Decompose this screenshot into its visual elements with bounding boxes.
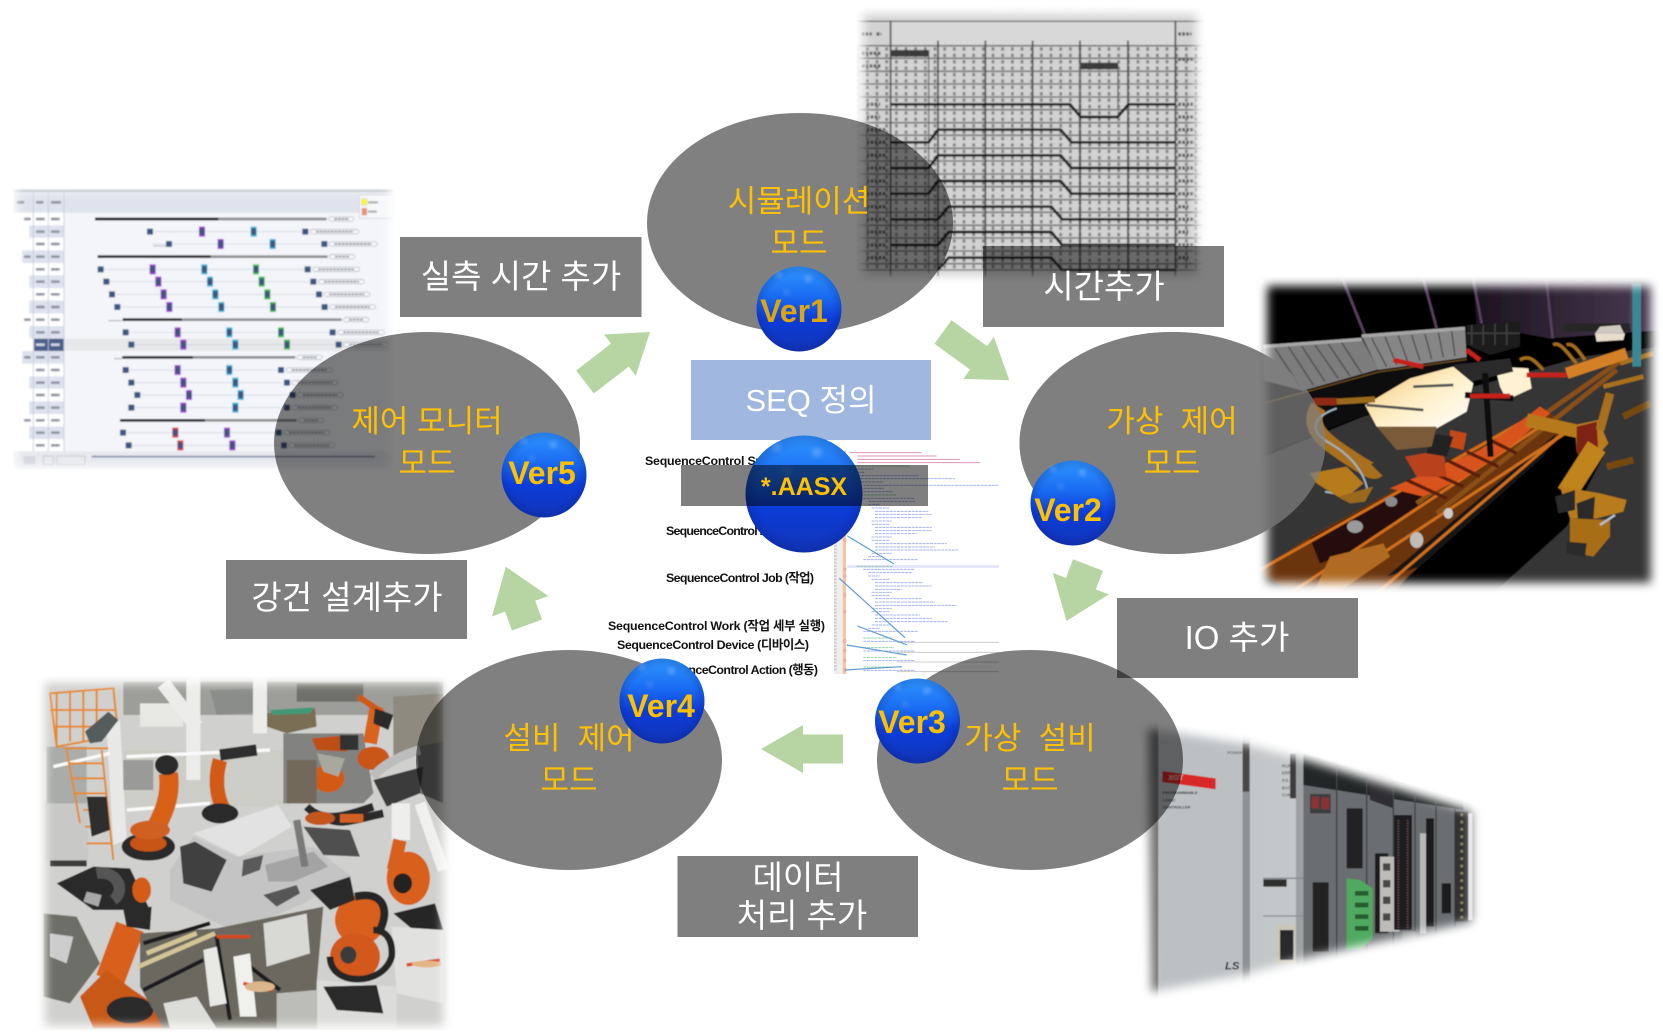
sphere: Ver1 xyxy=(756,266,842,352)
PLC labels: LS xyxy=(1225,960,1240,972)
image: LS XGT PLC controller photo xyxy=(1137,720,1483,1003)
ellipse: left control monitor mode: 제어 모니터 xyxy=(351,404,503,439)
ellipse: bottom left equipment control mode: 모드 xyxy=(540,763,598,798)
label box: robust design added xyxy=(226,560,467,639)
legend xyxy=(359,195,393,218)
PLC labels: BAT xyxy=(1282,785,1290,790)
orange fixtures xyxy=(1390,407,1550,498)
sphere: Ver4: Ver4 xyxy=(627,688,695,724)
panel: XML source code xyxy=(834,451,999,674)
arrow: bottom left to left xyxy=(478,556,555,635)
PLC labels: PROGRAMMABLE xyxy=(1163,790,1198,795)
label box: data processing added: 데이터 xyxy=(752,859,844,896)
sphere: Ver1: Ver1 xyxy=(760,293,828,329)
image: 3D virtual welding line simulation xyxy=(1257,277,1660,593)
label box: data processing added: 처리 추가 xyxy=(737,897,867,934)
sphere: Ver2: Ver2 xyxy=(1034,492,1102,528)
sphere: Ver5: Ver5 xyxy=(508,455,576,491)
arrow: top to right xyxy=(928,311,1025,401)
silver car body xyxy=(170,750,423,932)
sphere: Ver4 xyxy=(620,658,704,744)
label box: time added: 시간추가 xyxy=(1043,268,1165,305)
ellipse: bottom right virtual equipment mode: 모드 xyxy=(1001,763,1059,798)
ellipse: bottom left equipment control mode: 설비 제어 xyxy=(503,721,635,756)
label box: time added xyxy=(983,246,1224,327)
sphere: Ver3 xyxy=(875,678,960,764)
timeline bars xyxy=(95,219,387,450)
PLC labels: XGT xyxy=(1168,773,1184,782)
ellipse: right virtual control mode xyxy=(1020,332,1326,554)
label box: SEQ definition: SEQ 정의 xyxy=(745,383,877,418)
sphere: Ver5 xyxy=(502,432,586,518)
sphere: AASX xyxy=(681,436,928,552)
ellipse: top simulation mode xyxy=(647,113,953,333)
image: control monitor timeline screenshot xyxy=(13,188,393,470)
center labels: SequenceControl hierarchy: SequenceControl Action (행동) xyxy=(654,662,818,677)
arrow: right to bottom right xyxy=(1038,554,1116,632)
PLC labels: CHK xyxy=(1282,793,1291,798)
orange robots lower xyxy=(43,803,443,1028)
ellipse: bottom left equipment control mode xyxy=(416,650,722,870)
center labels: SequenceControl hierarchy: SequenceControl Flow (흐름) xyxy=(666,524,816,538)
center labels: SequenceControl hierarchy xyxy=(608,454,835,677)
PLC connectors xyxy=(1310,794,1472,952)
PLC labels: POWER xyxy=(1227,750,1243,755)
rail and shadow xyxy=(1257,357,1627,593)
center labels: SequenceControl hierarchy: SequenceControl Job (작업) xyxy=(666,571,814,585)
connector arrows xyxy=(839,536,907,670)
label box: IO added: IO 추가 xyxy=(1185,619,1289,656)
right ellipse backing xyxy=(1020,332,1326,554)
ellipse: top simulation mode: 시뮬레이션 xyxy=(728,184,870,219)
ellipse: right virtual control mode: 가상 제어 xyxy=(1106,404,1238,439)
PLC labels: LOGIC xyxy=(1163,797,1175,802)
label box: data processing added xyxy=(678,856,918,937)
center labels: SequenceControl hierarchy: SequenceControl Work (작업 세부 실행) xyxy=(608,618,825,633)
arrow: left to top xyxy=(569,311,666,403)
label box: measured time xyxy=(400,237,642,317)
arrow: bottom right to bottom left xyxy=(761,725,843,773)
car body xyxy=(1365,325,1625,457)
ellipse: left control monitor mode: 모드 xyxy=(398,446,456,481)
ellipse: right virtual control mode: 모드 xyxy=(1143,446,1201,481)
label box: measured time: 실측 시간 추가 xyxy=(421,258,621,295)
ellipse: bottom right virtual equipment mode xyxy=(877,650,1183,870)
image: cycle time chart xyxy=(857,4,1210,283)
PLC labels xyxy=(1162,750,1291,972)
ellipse: left control monitor mode xyxy=(274,332,580,554)
label box: IO added xyxy=(1117,598,1358,678)
label box: SEQ definition xyxy=(691,360,931,440)
image: robot body welding factory photo xyxy=(37,677,453,1030)
label box: robust design added: 강건 설계추가 xyxy=(251,579,443,616)
orange robots upper xyxy=(122,697,393,861)
image: cycle time chart: CYCLE TIME CHART xyxy=(996,4,1138,16)
center labels: SequenceControl hierarchy: SequenceControl Device (디바이스) xyxy=(617,638,809,652)
PLC labels: RUN xyxy=(1282,763,1291,768)
orange cage and ladder xyxy=(50,688,117,860)
sphere: Ver2 xyxy=(1030,460,1116,546)
PLC labels: P.S. xyxy=(1282,778,1290,783)
ellipse: bottom right virtual equipment mode: 가상 설비 xyxy=(964,721,1096,756)
sphere: Ver3: Ver3 xyxy=(878,704,946,740)
center labels: SequenceControl hierarchy: SequenceControl System (시스템) xyxy=(645,454,835,468)
ellipse: top simulation mode: 모드 xyxy=(770,226,828,261)
sphere: AASX: *.AASX xyxy=(761,473,847,501)
robots xyxy=(1310,283,1653,557)
PLC labels: ERR xyxy=(1282,771,1291,776)
PLC labels: CONTROLLER xyxy=(1163,805,1190,810)
